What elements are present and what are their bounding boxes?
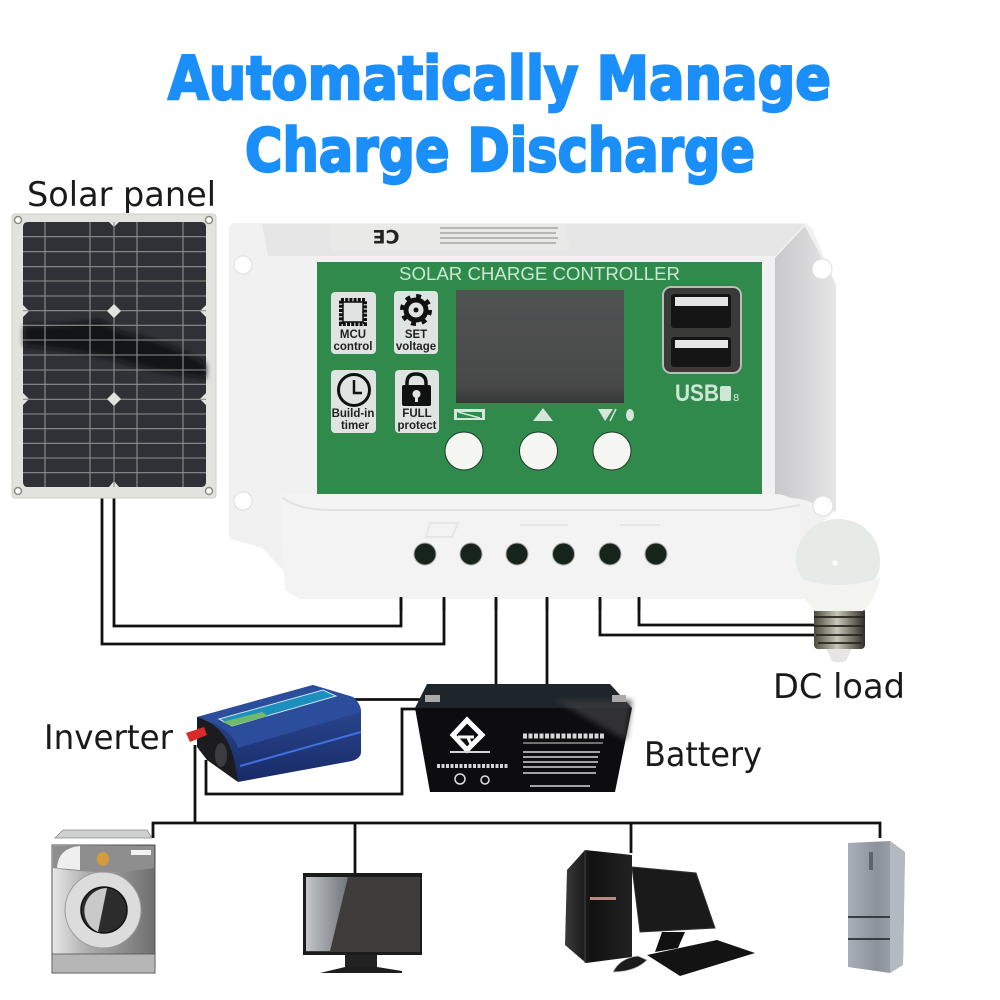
- badge: Build-in timer: Build-in: [332, 408, 374, 420]
- badge: Build-in timer: timer: [341, 420, 370, 432]
- controller title: SOLAR CHARGE CONTROLLER: [399, 263, 680, 284]
- refrigerator: [848, 841, 905, 973]
- USB mark: 8: [733, 393, 739, 404]
- badge: MCU control: [331, 292, 376, 354]
- title: [168, 44, 831, 186]
- badge: FULL protect: [395, 370, 439, 433]
- label: solar panel: Solar panel: [27, 175, 216, 215]
- DC load bulb: [796, 519, 880, 662]
- cables entering terminals: [401, 597, 639, 610]
- diamonds: [107, 304, 121, 406]
- inverter body: [197, 685, 361, 782]
- battery: [415, 684, 632, 792]
- reflection: [24, 320, 206, 378]
- solar cells: [23, 222, 206, 487]
- panel frame: [12, 214, 216, 498]
- badge: SET voltage: voltage: [396, 341, 436, 353]
- terminals: [425, 695, 626, 702]
- end panel: [197, 717, 238, 782]
- display: [869, 852, 873, 870]
- dual USB port: [663, 287, 741, 373]
- certification marks: [455, 774, 489, 784]
- globe: [796, 519, 880, 585]
- title: Automatically Manage: [168, 44, 831, 114]
- case: [415, 708, 632, 792]
- bulb tip: [826, 648, 852, 662]
- cabinet: [52, 845, 155, 973]
- USB mark: USB: [675, 380, 719, 407]
- desktop computer: [565, 850, 755, 976]
- mounting holes: [14, 216, 212, 494]
- badge: FULL protect: FULL: [402, 408, 432, 420]
- plinth: [52, 954, 155, 973]
- top bevel: [262, 224, 805, 256]
- terminal cover: [281, 494, 802, 599]
- cabinet: [848, 841, 905, 973]
- side groove: [240, 732, 361, 766]
- right flange shade: [775, 226, 836, 512]
- badge: MCU control: MCU: [340, 329, 366, 341]
- side face: [890, 841, 905, 973]
- solar charge controller: [229, 223, 836, 599]
- base: [320, 967, 402, 973]
- wiring diagram: [102, 497, 880, 875]
- label: DC load: DC load: [773, 667, 905, 707]
- LCD screen: [456, 290, 624, 403]
- button symbols: [454, 408, 634, 421]
- screen highlight: [306, 877, 348, 951]
- stand: [345, 955, 377, 967]
- screen: [306, 877, 420, 952]
- lid: [55, 830, 152, 838]
- spec label: [328, 224, 570, 250]
- control panel: [53, 846, 154, 872]
- door ring: [65, 872, 141, 948]
- mouse: [613, 956, 647, 972]
- badge: SET voltage: [394, 291, 438, 354]
- battery text lines: [437, 736, 604, 786]
- screw base: [814, 608, 865, 649]
- keyboard: [647, 940, 755, 976]
- buttons: [445, 432, 631, 470]
- monitor: [303, 873, 422, 973]
- terminal holes: [414, 543, 667, 565]
- tower: [565, 850, 632, 963]
- display: [632, 867, 715, 932]
- gloss: [555, 700, 632, 740]
- red terminal: [186, 727, 207, 742]
- label: Inverter: Inverter: [44, 718, 173, 758]
- badge: MCU control: control: [334, 341, 372, 353]
- neck: [797, 578, 880, 611]
- badge: Build-in timer: [331, 370, 376, 433]
- stand: [655, 932, 685, 952]
- spec label: CE: [373, 225, 399, 247]
- terminal legends: [426, 523, 660, 537]
- door gaps: [848, 917, 890, 939]
- washing machine: [52, 830, 155, 973]
- cell grid: [23, 222, 206, 487]
- display window: [219, 690, 336, 726]
- lid: [415, 684, 632, 708]
- green faceplate: [317, 262, 762, 494]
- inverter: [186, 685, 361, 782]
- top face: [197, 685, 361, 748]
- logo: [453, 720, 482, 750]
- badge: SET voltage: SET: [405, 329, 427, 341]
- bezel: [303, 873, 422, 955]
- housing: [229, 223, 836, 599]
- mounting holes: [234, 256, 833, 516]
- badge: FULL protect: protect: [398, 420, 437, 432]
- title: Charge Discharge: [245, 116, 755, 186]
- solar panel: [12, 214, 216, 498]
- label: Battery: Battery: [644, 735, 762, 775]
